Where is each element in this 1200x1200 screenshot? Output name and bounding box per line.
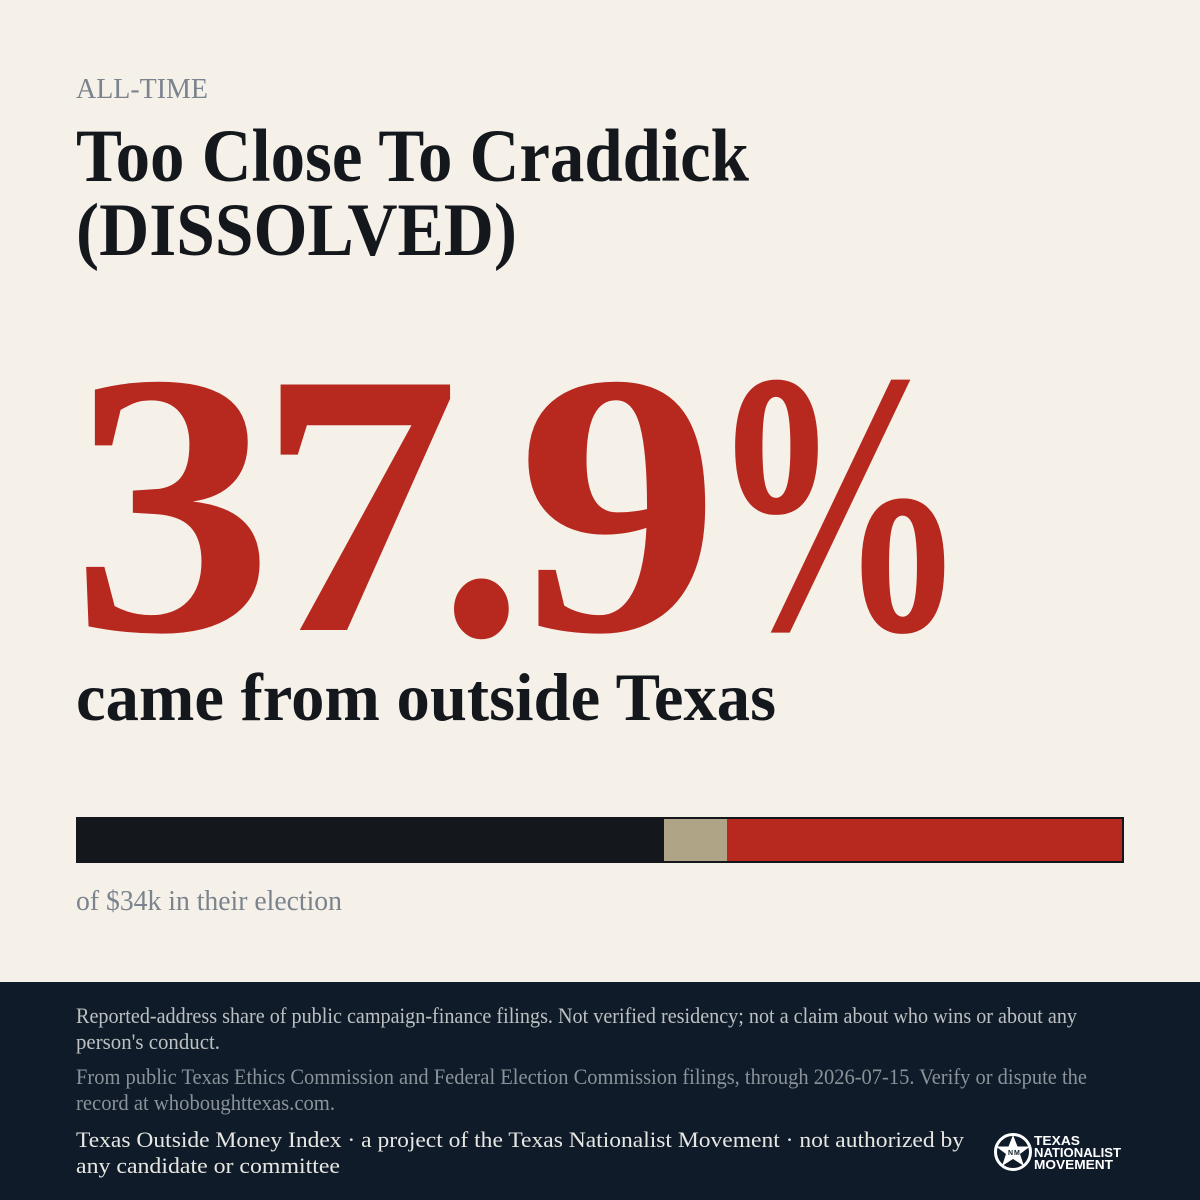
logo: Texas Nationalist Movement: MOVEMENT <box>1034 1158 1113 1172</box>
stacked bar <box>76 817 1124 863</box>
logo: Texas Nationalist Movement <box>996 1134 1121 1172</box>
logo: Texas Nationalist Movement: N <box>1008 1150 1013 1157</box>
big percentage: 9 <box>517 297 720 712</box>
bar caption: of $34k in their election <box>76 885 342 917</box>
title: (DISSOLVED) <box>76 189 517 272</box>
subheading: came from outside Texas <box>76 659 776 735</box>
disclaimer text: person's conduct. <box>76 1029 220 1054</box>
big percentage: % <box>708 294 969 710</box>
attribution text: Texas Outside Money Index · a project of the Texas Nationalist Movement · not authorized by <box>76 1127 964 1152</box>
logo: Texas Nationalist Movement: TEXAS <box>1034 1134 1080 1148</box>
source text <box>76 1064 1087 1115</box>
big percentage: . <box>439 301 524 716</box>
eyebrow label: ALL-TIME <box>76 73 208 105</box>
attribution text: any candidate or committee <box>76 1153 340 1178</box>
footer panel <box>0 982 1200 1200</box>
title <box>76 115 749 272</box>
title: Too Close To Craddick <box>76 115 749 198</box>
logo: Texas Nationalist Movement: NATIONALIST <box>1034 1146 1121 1160</box>
attribution text <box>76 1127 964 1178</box>
disclaimer text: Reported-address share of public campaign-finance filings. Not verified residency; not a claim about who wins or about any <box>76 1003 1077 1028</box>
big percentage <box>71 294 969 716</box>
big percentage: 37 <box>71 297 460 712</box>
source text: record at whoboughttexas.com. <box>76 1090 335 1115</box>
logo: Texas Nationalist Movement: M <box>1014 1150 1020 1157</box>
disclaimer text <box>76 1003 1077 1054</box>
source text: From public Texas Ethics Commission and Federal Election Commission filings, through 2026-07-15. Verify or dispute the <box>76 1064 1087 1089</box>
